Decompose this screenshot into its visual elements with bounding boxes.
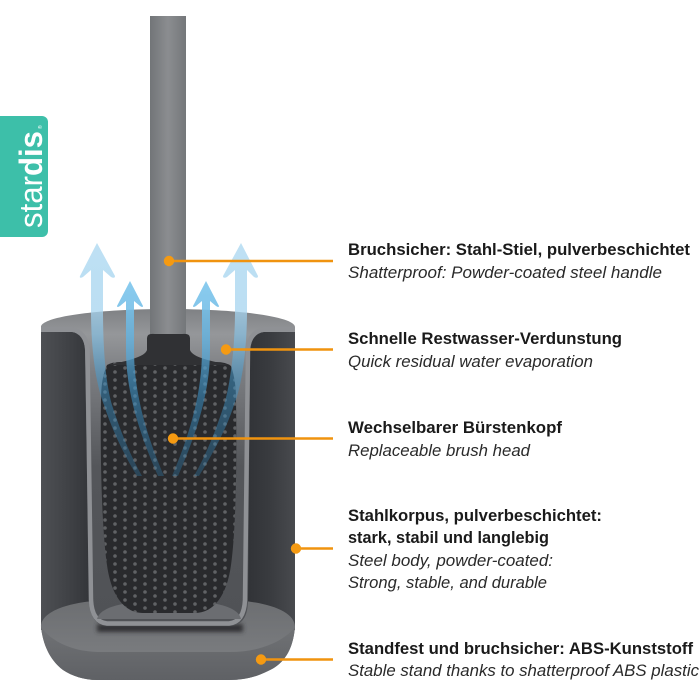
brush head [101, 362, 236, 613]
callout: base: Standfest und bruchsicher: ABS-Kunststoff [348, 640, 694, 658]
callout: evaporation: Schnelle Restwasser-Verdunstung [348, 330, 622, 348]
logo: stardis badge: ® [37, 125, 44, 129]
arrow: inner left [117, 281, 164, 476]
base [41, 600, 295, 680]
arrow: outer left [80, 243, 142, 476]
callout: brush head [168, 419, 563, 460]
callout: steel body [291, 507, 602, 592]
arrow: inner right [172, 281, 219, 476]
callout: steel body: stark, stabil und langlebig [348, 529, 549, 547]
arrow: outer right [194, 243, 258, 476]
callout: steel body: Stahlkorpus, pulverbeschichtet: [348, 507, 602, 525]
product illustration: toilet brush in holder [41, 16, 295, 680]
callout: brush head: Replaceable brush head [348, 442, 531, 460]
callout: base [256, 640, 700, 680]
steel body walls [41, 330, 295, 630]
callout: handle [164, 241, 691, 282]
logo: stardis badge: stardis [13, 131, 49, 228]
arrows: evaporation [80, 243, 258, 476]
callout: evaporation [221, 330, 622, 371]
callout: handle: Shatterproof: Powder-coated steel handle [348, 264, 662, 282]
callout: handle: Bruchsicher: Stahl-Stiel, pulverbeschichtet [348, 241, 691, 259]
callout: steel body: Steel body, powder-coated: [348, 552, 553, 570]
callout: steel body: Strong, stable, and durable [348, 574, 547, 592]
rim and inner cup [41, 309, 295, 626]
callout: brush head: Wechselbarer Bürstenkopf [348, 419, 563, 437]
handle [150, 16, 186, 338]
callout: evaporation: Quick residual water evaporation [348, 353, 593, 371]
callout: base: Stable stand thanks to shatterproof ABS plastic [348, 662, 700, 680]
logo: stardis badge [0, 116, 49, 237]
brush collar [107, 334, 230, 365]
